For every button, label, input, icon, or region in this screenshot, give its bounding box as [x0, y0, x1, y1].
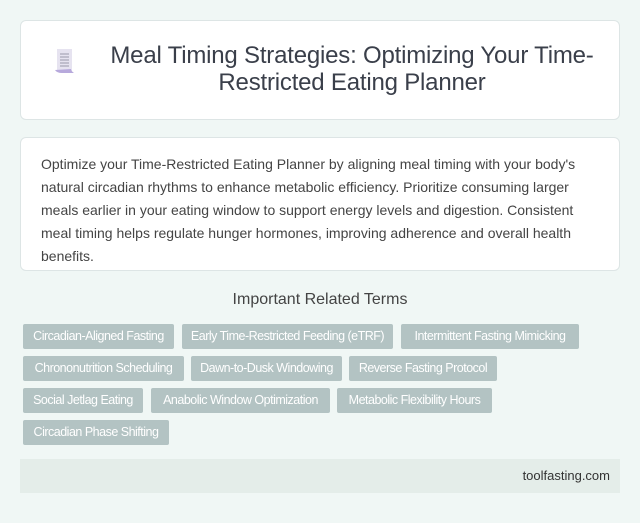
description text: Optimize your Time-Restricted Eating Planner by aligning meal timing with your body's [41, 156, 575, 172]
description text: benefits. [41, 248, 94, 264]
tags: Chrononutrition Scheduling [35, 361, 172, 375]
tags: Social Jetlag Eating [33, 393, 133, 407]
header card [20, 20, 620, 120]
description text: natural circadian rhythms to enhance metabolic efficiency. Prioritize consuming larger [41, 179, 569, 195]
icon: document [55, 49, 74, 73]
section heading: Important Related Terms [233, 291, 407, 308]
footer source text: toolfasting.com [523, 468, 610, 483]
tags: Early Time-Restricted Feeding (eTRF) [191, 329, 384, 343]
tags: Anabolic Window Optimization [163, 393, 318, 407]
description text: meals earlier in your eating window to support energy levels and digestion. Consistent [41, 202, 573, 218]
tags: Reverse Fasting Protocol [359, 361, 487, 375]
title: Meal Timing Strategies: Optimizing Your Time-Restricted Eating Planner [110, 42, 594, 96]
footer [20, 459, 620, 493]
description text: meal timing helps regulate hunger hormones, improving adherence and overall health [41, 225, 571, 241]
tags: Metabolic Flexibility Hours [349, 393, 480, 407]
description card [20, 137, 620, 271]
tags: Circadian-Aligned Fasting [33, 329, 164, 343]
tags: Circadian Phase Shifting [34, 425, 158, 439]
tags: Dawn-to-Dusk Windowing [200, 361, 333, 375]
tags: Intermittent Fasting Mimicking [414, 329, 566, 343]
description text [41, 156, 575, 264]
